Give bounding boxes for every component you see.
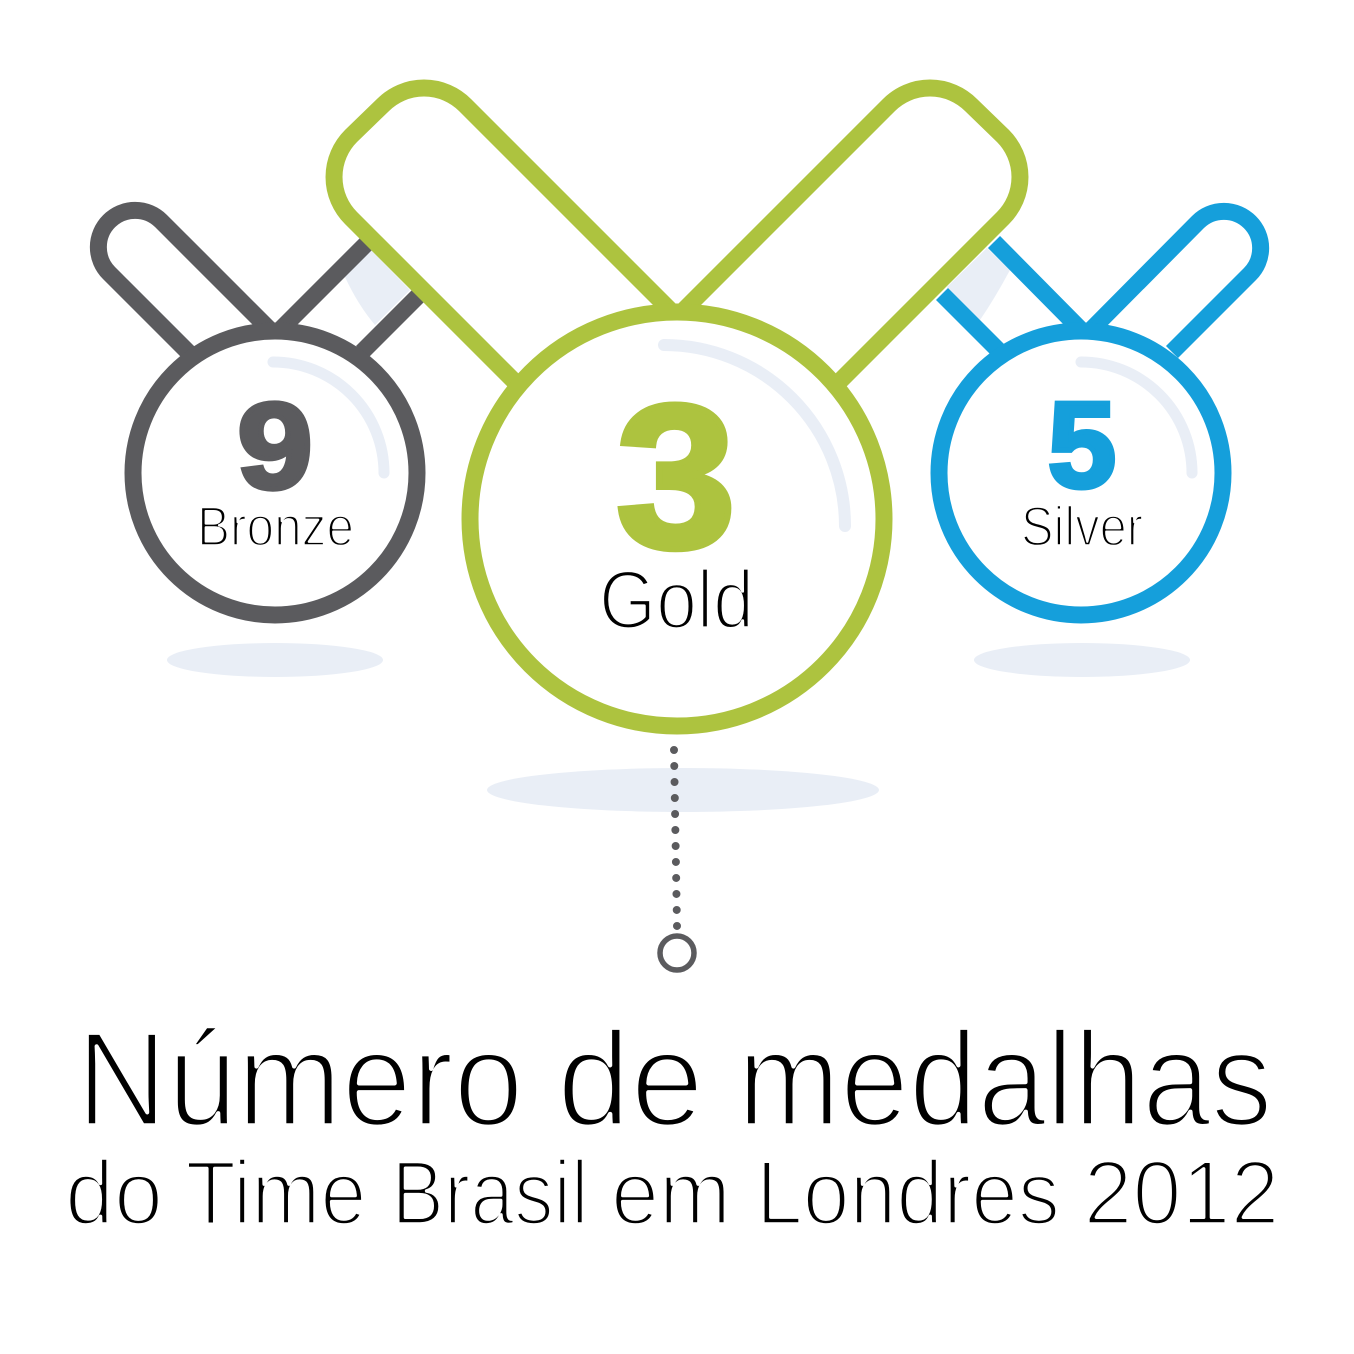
subtitle [65, 1143, 1280, 1244]
silver highlight [1081, 362, 1192, 473]
subtitle: Londres [756, 1143, 1060, 1244]
subtitle: em [611, 1143, 731, 1244]
silver ribbon fold [947, 248, 1010, 320]
gold disc [470, 312, 884, 726]
title [76, 1004, 1272, 1154]
bronze highlight [273, 362, 384, 473]
connector end ring [660, 936, 694, 970]
subtitle: Time [186, 1143, 366, 1244]
gold highlight [664, 345, 845, 526]
subtitle: do [65, 1143, 163, 1244]
bronze ribbon fold [345, 250, 410, 325]
dotted connector [674, 750, 677, 926]
silver count: 5 [1048, 377, 1116, 513]
bronze shadow [167, 643, 383, 677]
title: de [557, 1004, 704, 1154]
gold medal [334, 88, 1020, 812]
bronze medal [98, 210, 420, 677]
silver medal [939, 211, 1261, 677]
silver shadow [974, 643, 1190, 677]
bronze label: Bronze [197, 494, 354, 558]
bronze ribbon [98, 210, 420, 353]
silver disc [939, 331, 1223, 615]
bronze count: 9 [238, 378, 312, 514]
title: Número [76, 1004, 524, 1154]
gold ribbon [334, 88, 1020, 381]
subtitle: 2012 [1084, 1143, 1280, 1244]
silver ribbon [942, 211, 1261, 352]
gold shadow [487, 768, 879, 812]
bronze disc [133, 331, 417, 615]
gold count: 3 [616, 363, 736, 591]
silver label: Silver [1021, 494, 1143, 558]
subtitle: Brasil [392, 1143, 588, 1244]
gold label: Gold [599, 553, 754, 646]
title: medalhas [738, 1004, 1272, 1154]
